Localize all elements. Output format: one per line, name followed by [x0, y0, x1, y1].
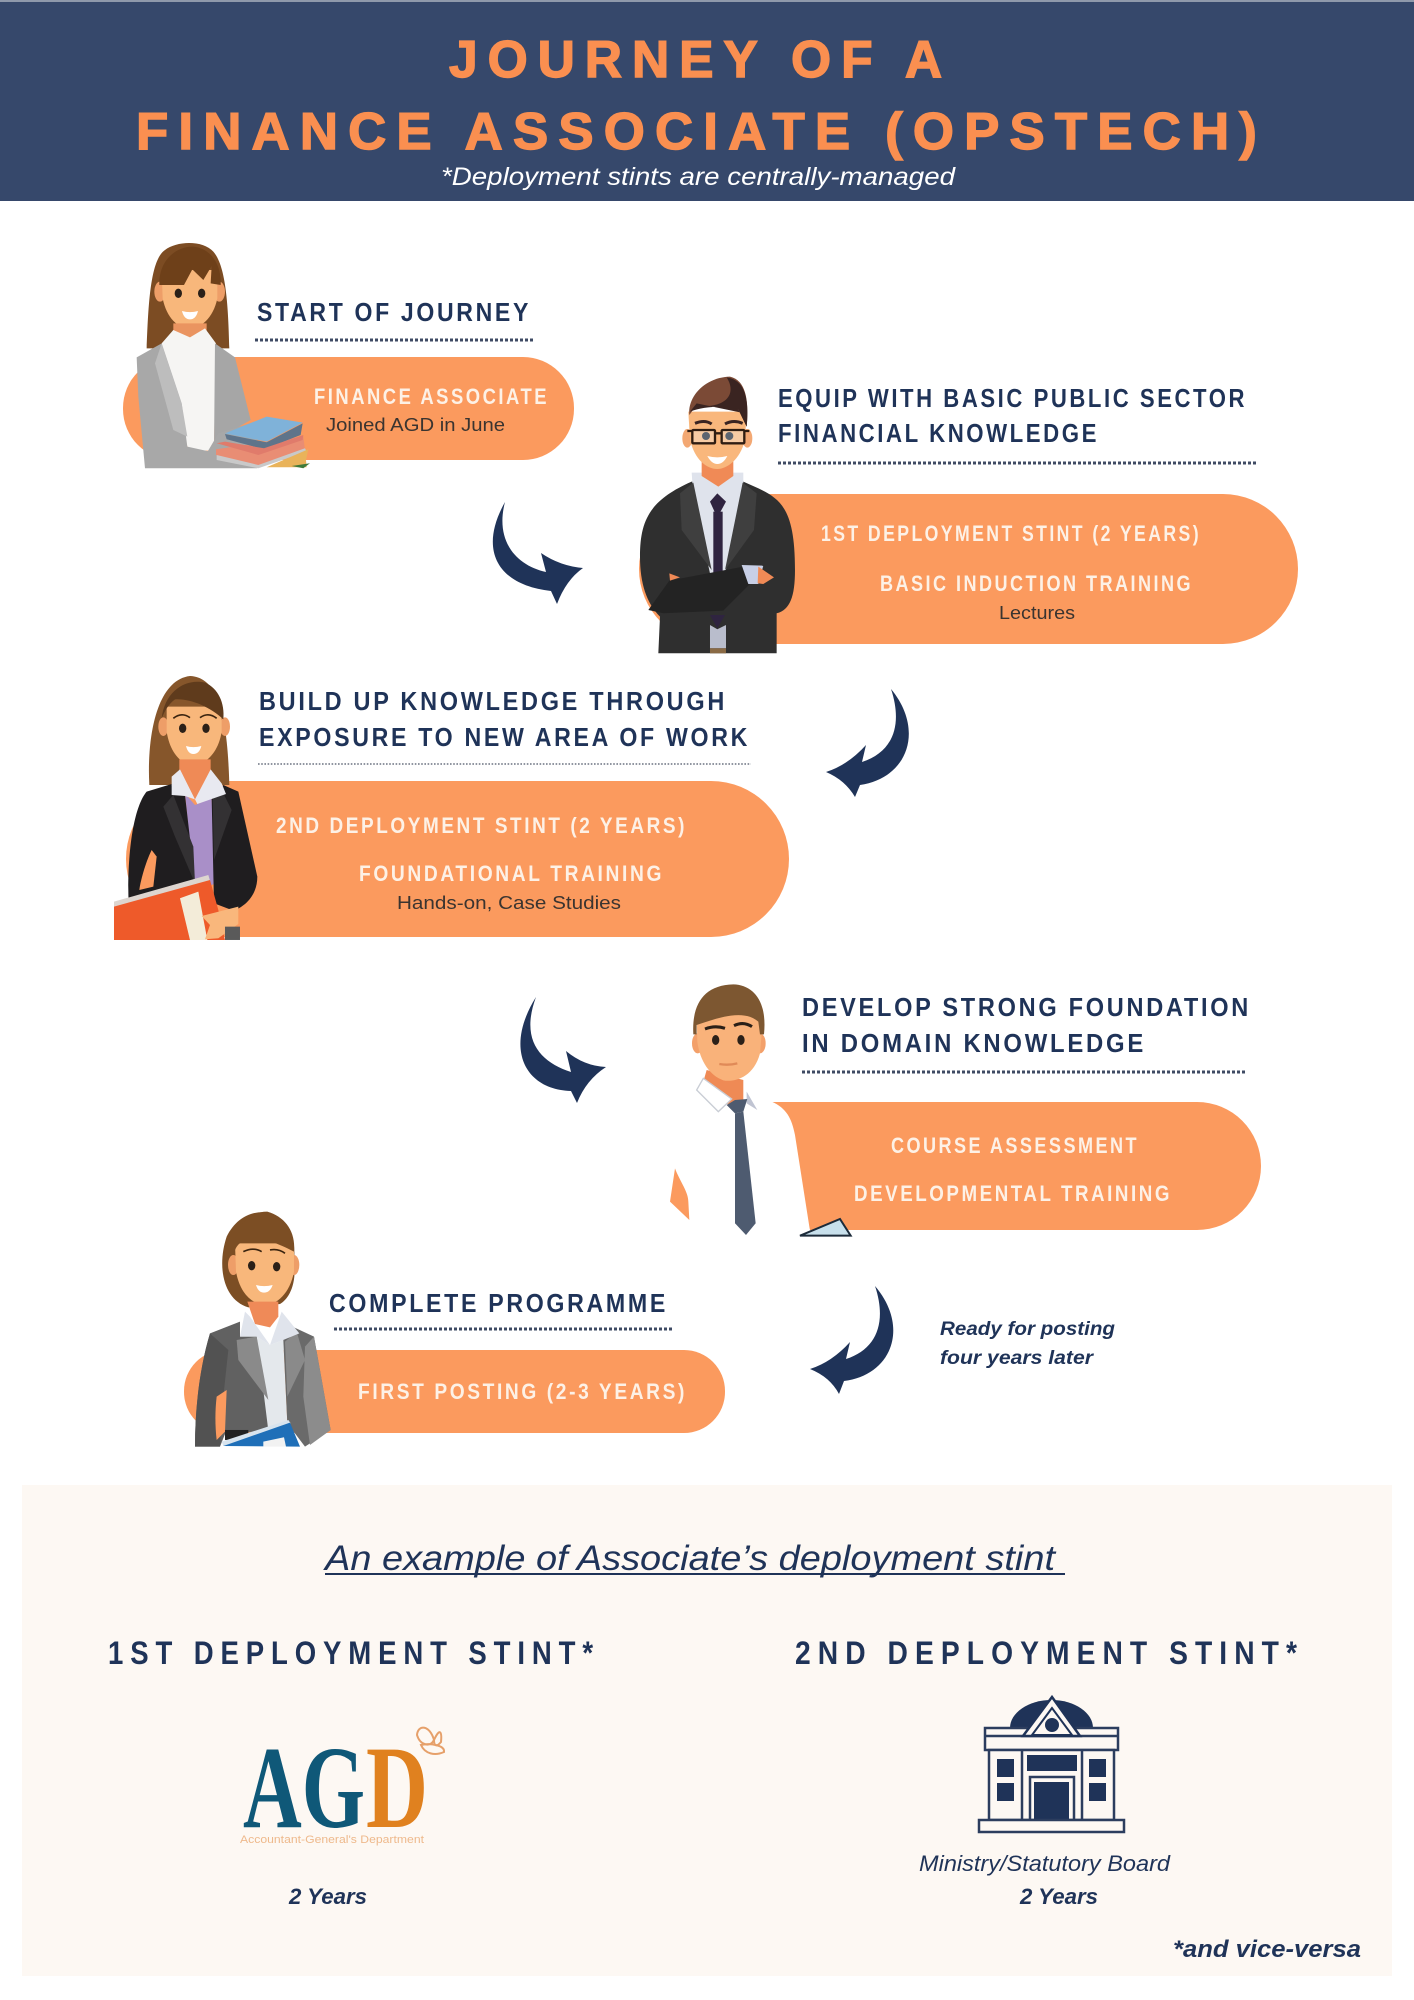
panel: complete programme	[184, 1212, 725, 1447]
logo: AGD: AG	[243, 1722, 365, 1853]
icon: man with glasses	[640, 377, 795, 653]
logo: AGD: Accountant-General's Department	[240, 1834, 424, 1846]
title	[136, 31, 1267, 161]
panel: build up knowledge	[114, 676, 789, 940]
pill: course assessment	[772, 1102, 1261, 1230]
icon: man with tie	[670, 984, 851, 1236]
pill text: second stint: 2ND DEPLOYMENT STINT (2 YEARS)	[276, 813, 687, 838]
heading: first stint: 1ST DEPLOYMENT STINT*	[108, 1635, 600, 1671]
pill text: finance associate: FINANCE ASSOCIATE	[314, 384, 549, 409]
icon: woman with blue folder	[195, 1212, 331, 1447]
panel heading: An example of Associate’s deployment stint	[323, 1539, 1056, 1578]
heading: second stint: 2ND DEPLOYMENT STINT*	[795, 1635, 1304, 1671]
arrow: first stint to second stint	[826, 689, 909, 797]
pill text: second stint: FOUNDATIONAL TRAINING	[359, 861, 664, 886]
panel: basic public sector knowledge	[639, 377, 1298, 653]
subtitle: *Deployment stints are centrally-managed	[441, 163, 956, 191]
pill: first deployment stint	[639, 494, 1298, 644]
pill text: first stint	[821, 521, 1201, 623]
heading: build up knowledge	[259, 686, 750, 752]
header banner	[0, 0, 1414, 201]
note: ready for posting: four years later	[940, 1348, 1095, 1369]
heading: build up knowledge: BUILD UP KNOWLEDGE THROUGH	[259, 686, 727, 716]
pill text: finance associate	[314, 384, 549, 435]
heading: start of journey: START OF JOURNEY	[257, 297, 531, 327]
icon: government building	[979, 1697, 1124, 1832]
heading: develop strong foundation: IN DOMAIN KNOWLEDGE	[802, 1028, 1146, 1058]
note: ready for posting	[940, 1319, 1115, 1369]
heading: complete programme: COMPLETE PROGRAMME	[329, 1288, 668, 1318]
label: 2 years under ministry: 2 Years	[1019, 1884, 1098, 1909]
pill text: first stint: Lectures	[999, 603, 1075, 623]
heading: equip with basic knowledge: FINANCIAL KNOWLEDGE	[778, 418, 1099, 448]
panel: domain knowledge	[670, 984, 1261, 1236]
logo: AGD: D	[366, 1722, 428, 1853]
title: FINANCE ASSOCIATE (OPSTECH)	[136, 103, 1267, 161]
pill text: first stint: 1ST DEPLOYMENT STINT (2 YEARS)	[821, 521, 1201, 546]
pill text: second stint: Hands-on, Case Studies	[397, 893, 621, 913]
panel: example of deployment stint	[22, 1485, 1392, 1976]
heading: equip with basic knowledge: EQUIP WITH BASIC PUBLIC SECTOR	[778, 383, 1247, 413]
icon: woman with orange folder	[114, 676, 257, 940]
note: ready for posting: Ready for posting	[940, 1319, 1115, 1340]
heading: build up knowledge: EXPOSURE TO NEW AREA OF WORK	[259, 722, 750, 752]
pill: first posting	[184, 1350, 725, 1433]
title: JOURNEY OF A	[449, 31, 952, 89]
pill text: course assessment: COURSE ASSESSMENT	[891, 1133, 1139, 1158]
pill text: course assessment: DEVELOPMENTAL TRAINING	[854, 1181, 1172, 1206]
icon: woman with books	[137, 243, 310, 468]
arrow: second stint to domain knowledge	[520, 997, 606, 1103]
footnote: vice versa: *and vice-versa	[1173, 1936, 1361, 1963]
panel: start of journey	[123, 243, 574, 468]
pill text: course assessment	[854, 1133, 1172, 1206]
label: 2 years under AGD: 2 Years	[288, 1884, 367, 1909]
pill text: second stint	[276, 813, 687, 913]
pill: finance associate	[123, 357, 574, 460]
heading: equip with basic knowledge	[778, 383, 1247, 448]
label: ministry or statutory board: Ministry/Statutory Board	[919, 1851, 1171, 1876]
pill text: first stint: BASIC INDUCTION TRAINING	[880, 571, 1193, 596]
arrow: domain knowledge to posting	[810, 1286, 893, 1394]
pill text: finance associate: Joined AGD in June	[326, 415, 505, 435]
heading: develop strong foundation: DEVELOP STRONG FOUNDATION	[802, 992, 1251, 1022]
pill text: first posting: FIRST POSTING (2-3 YEARS)	[358, 1379, 687, 1404]
heading: develop strong foundation	[802, 992, 1251, 1058]
pill: second deployment stint	[126, 781, 789, 937]
arrow: start to first stint	[493, 502, 583, 604]
